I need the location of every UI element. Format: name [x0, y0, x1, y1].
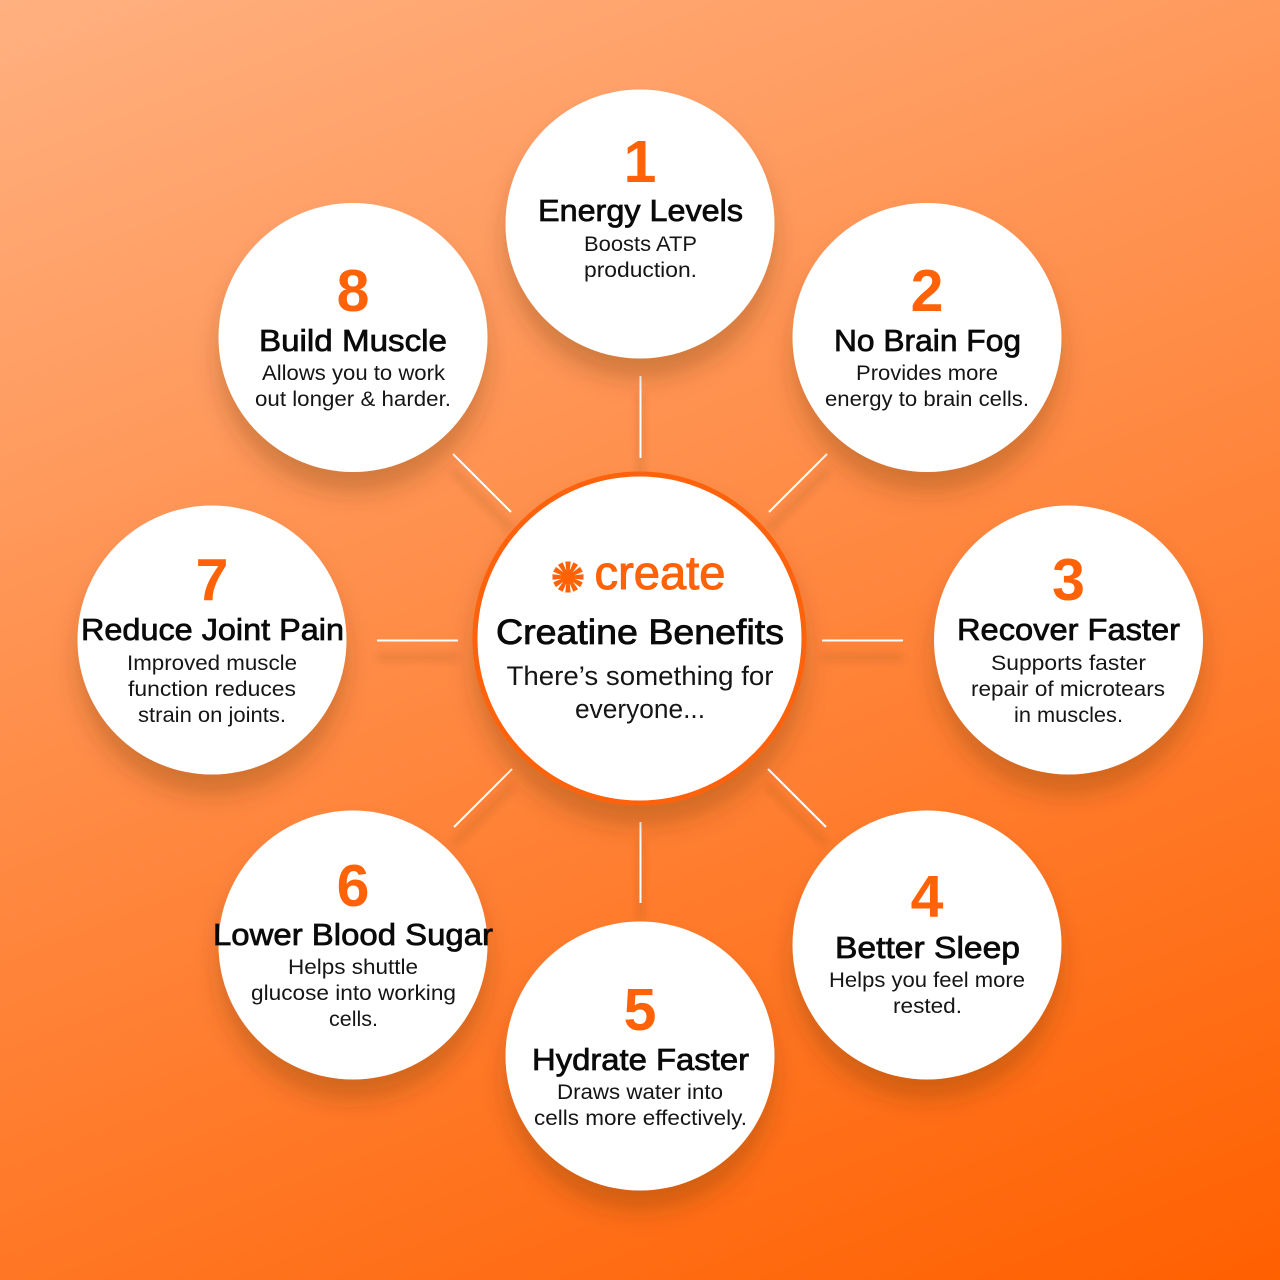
panel 7: reduce joint pain: strain on joints. — [138, 704, 286, 727]
panel 8: build muscle — [218, 203, 488, 472]
panel 5: hydrate faster — [506, 922, 774, 1190]
panel 4: better sleep: rested. — [893, 995, 962, 1018]
panel 1: energy levels: production. — [584, 259, 697, 282]
center heading: Creatine Benefits — [496, 613, 784, 652]
panel 5: hydrate faster: 5 — [624, 977, 656, 1043]
panel 5: hydrate faster: Hydrate Faster — [532, 1042, 749, 1077]
panel 7: reduce joint pain — [78, 506, 346, 774]
panel 3: recover faster: in muscles. — [1014, 704, 1123, 727]
panel 3: recover faster: repair of microtears — [971, 678, 1165, 701]
panel 7: reduce joint pain: Improved muscle — [127, 652, 297, 675]
center panel: creatine benefits — [475, 474, 804, 803]
panel 4: better sleep: Helps you feel more — [829, 969, 1025, 992]
panel 4: better sleep: Better Sleep — [835, 930, 1020, 965]
panel 4: better sleep — [792, 810, 1062, 1080]
panel 5: hydrate faster: Draws water into — [557, 1081, 723, 1104]
panel 1: energy levels: Boosts ATP — [584, 233, 697, 256]
panel 2: no brain fog: Provides more — [856, 362, 998, 385]
panel 6: lower blood sugar: 6 — [337, 853, 369, 919]
panel 3: recover faster: 3 — [1052, 547, 1085, 613]
panel 7: reduce joint pain: 7 — [196, 547, 228, 613]
panel 7: reduce joint pain: Reduce Joint Pain — [81, 612, 344, 647]
panel 2: no brain fog — [792, 203, 1062, 472]
panel 8: build muscle: Allows you to work — [262, 362, 446, 385]
panel 1: energy levels: 1 — [624, 129, 656, 195]
panel 4: better sleep: 4 — [911, 864, 944, 930]
panel 6: lower blood sugar: Lower Blood Sugar — [213, 917, 493, 952]
panel 5: hydrate faster: cells more effectively. — [534, 1107, 747, 1130]
center circle — [475, 474, 804, 803]
center subtitle: everyone... — [575, 694, 705, 724]
panel 6: lower blood sugar — [213, 810, 493, 1080]
panel 8: build muscle: out longer & harder. — [255, 388, 451, 411]
panel 7: reduce joint pain: function reduces — [128, 678, 296, 701]
panel 2: no brain fog: 2 — [911, 258, 943, 324]
panel 2: no brain fog: No Brain Fog — [834, 323, 1021, 358]
connector lines — [377, 376, 903, 903]
panel 6: lower blood sugar: cells. — [329, 1008, 378, 1031]
panel 6: lower blood sugar: Helps shuttle — [288, 956, 418, 979]
panel 8: build muscle: 8 — [337, 258, 369, 324]
logo wordmark: create — [594, 546, 726, 599]
panel 2: no brain fog: energy to brain cells. — [825, 388, 1029, 411]
panel 1: energy levels: Energy Levels — [538, 193, 743, 228]
connector line shadows — [377, 393, 903, 920]
center subtitle: There’s something for — [506, 661, 774, 691]
panel 3: recover faster — [934, 506, 1203, 774]
panel 6: lower blood sugar: glucose into working — [251, 982, 456, 1005]
center subtitle — [506, 661, 774, 724]
panel 1: energy levels — [506, 90, 774, 358]
panel 8: build muscle: Build Muscle — [259, 323, 447, 358]
icon: create logo asterisk — [552, 562, 584, 592]
panel 3: recover faster: Supports faster — [991, 652, 1146, 675]
panel 3: recover faster: Recover Faster — [957, 612, 1180, 647]
